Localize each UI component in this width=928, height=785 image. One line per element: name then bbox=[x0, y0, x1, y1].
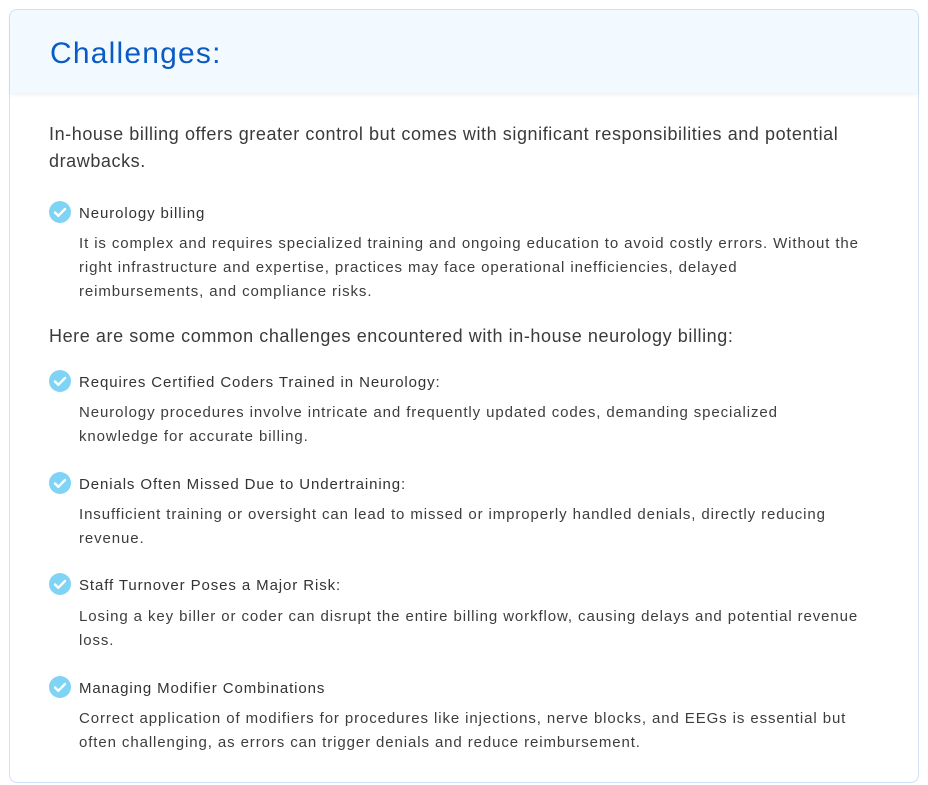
intro text: drawbacks. bbox=[49, 151, 146, 171]
item text: certified coders bbox=[79, 404, 778, 445]
icon: check 1 bbox=[49, 201, 71, 223]
title: Challenges: bbox=[50, 37, 222, 70]
icon: check 4 bbox=[49, 573, 71, 595]
item text: denials: revenue. bbox=[79, 530, 145, 547]
item heading: Neurology billing: Neurology billing bbox=[79, 205, 205, 222]
item text: denials bbox=[79, 506, 826, 547]
item text: certified coders: Neurology procedures involve intricate and frequently updated codes, demanding specialized bbox=[79, 404, 778, 421]
intro text bbox=[49, 124, 838, 171]
item text: Neurology billing: reimbursements, and compliance risks. bbox=[79, 283, 372, 300]
item text: staff turnover: Losing a key biller or coder can disrupt the entire billing workflow, causing delays and potential revenue bbox=[79, 608, 858, 625]
intro text: In-house billing offers greater control but comes with significant responsibilities and potential bbox=[49, 124, 838, 144]
item heading: modifiers: Managing Modifier Combinations bbox=[79, 680, 325, 697]
item text: modifiers: Correct application of modifiers for procedures like injections, nerve blocks, and EEGs is essential but bbox=[79, 710, 846, 727]
item text: modifiers: often challenging, as errors can trigger denials and reduce reimbursement. bbox=[79, 734, 641, 751]
icon: check 2 bbox=[49, 370, 71, 392]
item text: staff turnover: loss. bbox=[79, 632, 114, 649]
item text: staff turnover bbox=[79, 608, 858, 649]
item heading: staff turnover: Staff Turnover Poses a Major Risk: bbox=[79, 577, 341, 594]
item text: Neurology billing bbox=[79, 235, 859, 300]
item text: certified coders: knowledge for accurate billing. bbox=[79, 428, 309, 445]
item text: Neurology billing: right infrastructure and expertise, practices may face operational inefficiencies, delayed bbox=[79, 259, 738, 276]
item text: denials: Insufficient training or oversight can lead to missed or improperly handled denials, directly reducing bbox=[79, 506, 826, 523]
subheading text: Here are some common challenges encountered with in-house neurology billing: bbox=[49, 326, 733, 346]
item text: Neurology billing: It is complex and requires specialized training and ongoing education to avoid costly errors. Without the bbox=[79, 235, 859, 252]
header band bbox=[10, 10, 918, 93]
icon: check 5 bbox=[49, 676, 71, 698]
icon: check 3 bbox=[49, 472, 71, 494]
item heading: certified coders: Requires Certified Coders Trained in Neurology: bbox=[79, 374, 441, 391]
item heading: denials: Denials Often Missed Due to Undertraining: bbox=[79, 476, 406, 493]
item text: modifiers bbox=[79, 710, 846, 751]
